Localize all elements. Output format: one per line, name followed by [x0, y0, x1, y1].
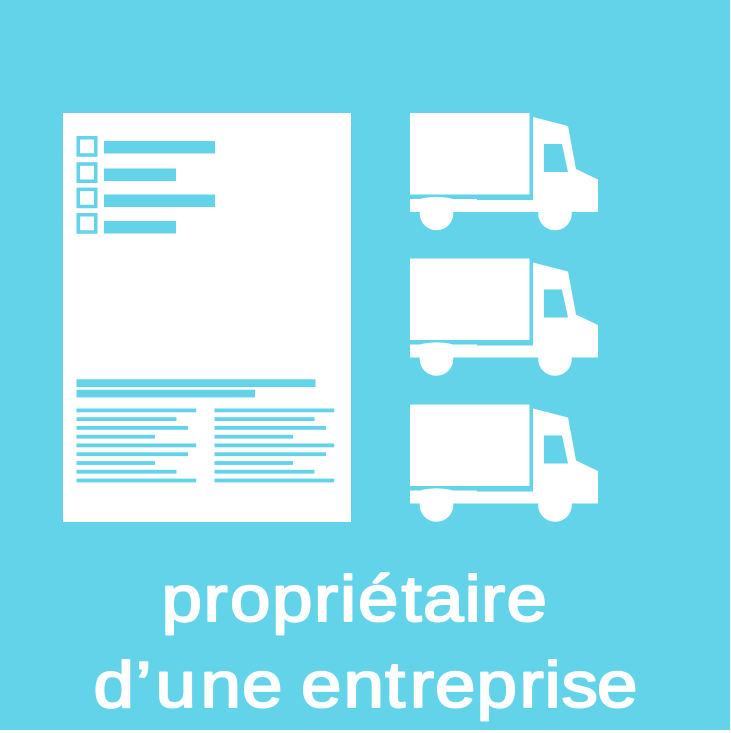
- heading lines: [76, 379, 316, 397]
- document: [63, 113, 351, 522]
- text column right: [214, 408, 334, 482]
- text column left: [76, 408, 196, 482]
- icon: truck 3: [410, 404, 598, 522]
- icon: truck 2: [410, 258, 598, 376]
- checklist: [76, 136, 215, 234]
- title: [94, 563, 637, 721]
- title: propriétaire: [162, 563, 547, 635]
- title: d’une entreprise: [94, 649, 637, 721]
- icon: truck 1: [410, 113, 598, 230]
